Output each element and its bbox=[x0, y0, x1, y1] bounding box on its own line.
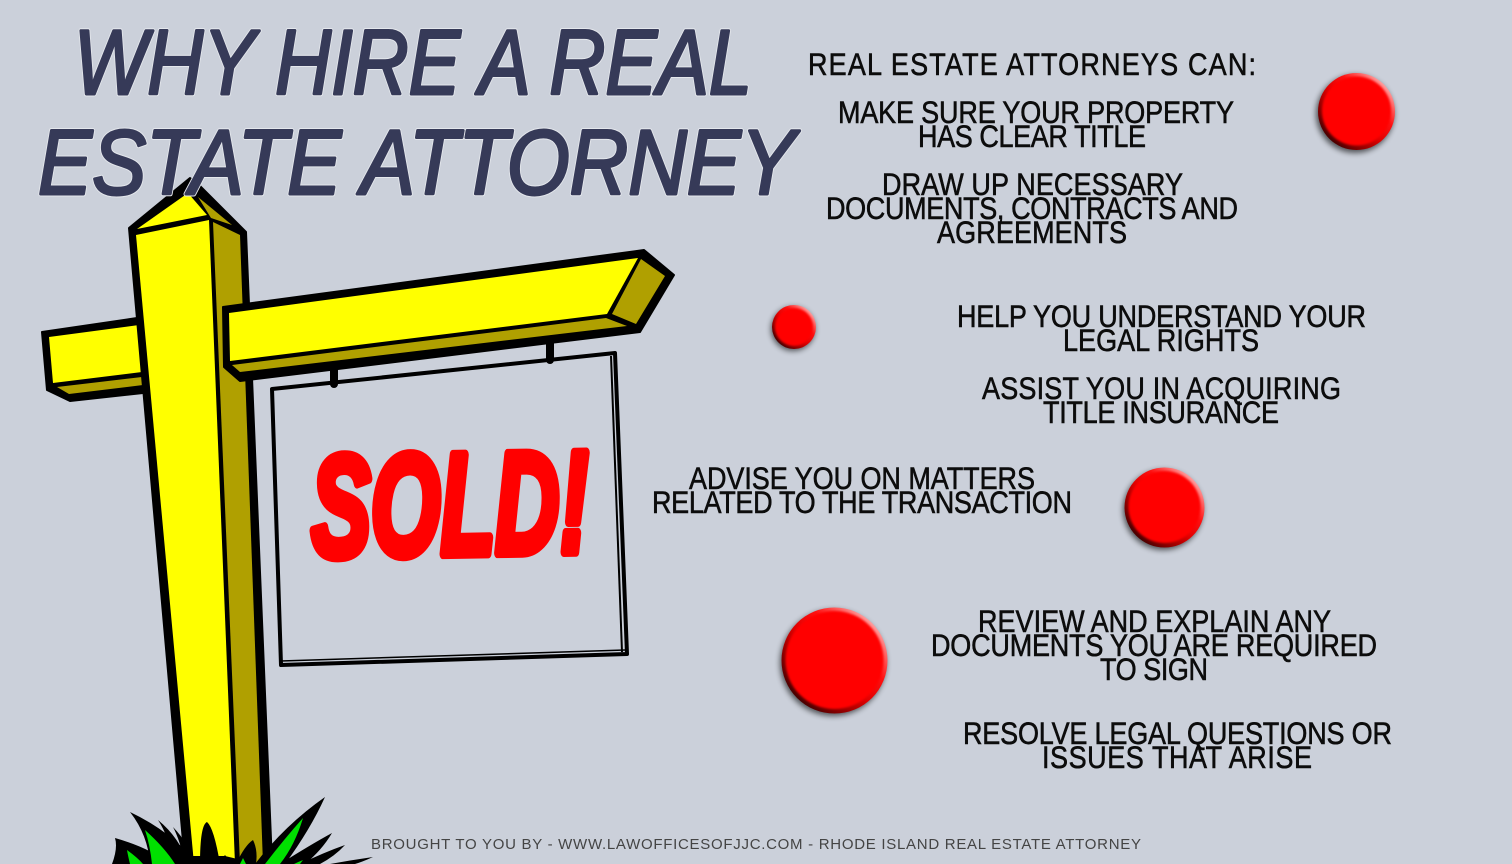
text block: clear title bbox=[838, 95, 1234, 155]
text block: review documents: DOCUMENTS YOU ARE REQUIRED bbox=[931, 628, 1377, 664]
sign hangers bbox=[334, 336, 550, 384]
text block: documents: DOCUMENTS, CONTRACTS AND bbox=[826, 191, 1238, 227]
title line 1: WHY HIRE A REAL bbox=[74, 12, 752, 114]
text block: title insurance bbox=[982, 371, 1341, 431]
icon: red dot large bbox=[780, 608, 888, 716]
text block: transaction: RELATED TO THE TRANSACTION bbox=[652, 485, 1072, 521]
icon: grass tuft bbox=[112, 797, 373, 864]
text block: legal questions: ISSUES THAT ARISE bbox=[1042, 740, 1312, 776]
heading: real estate attorneys can: REAL ESTATE ATTORNEYS CAN: bbox=[808, 47, 1256, 83]
vertical post bbox=[129, 178, 272, 864]
title line 2 halo: ESTATE ATTORNEY bbox=[38, 112, 800, 214]
text block: documents bbox=[826, 167, 1238, 251]
text block: legal questions bbox=[963, 716, 1392, 776]
text block: legal rights: HELP YOU UNDERSTAND YOUR bbox=[957, 299, 1366, 335]
text block: title insurance: ASSIST YOU IN ACQUIRING bbox=[982, 371, 1341, 407]
title line 2: ESTATE ATTORNEY bbox=[38, 112, 800, 214]
text block: clear title: HAS CLEAR TITLE bbox=[918, 119, 1146, 155]
text block: clear title: MAKE SURE YOUR PROPERTY bbox=[838, 95, 1234, 131]
sold text on sign: SOLD! bbox=[310, 422, 590, 587]
footer credit: BROUGHT TO YOU BY - WWW.LAWOFFICESOFJJC.COM - RHODE ISLAND REAL ESTATE ATTORNEY bbox=[371, 836, 1141, 853]
upper arm of post bbox=[223, 250, 674, 381]
icon: red dot top right bbox=[1316, 73, 1395, 153]
text block: review documents: REVIEW AND EXPLAIN ANY bbox=[978, 604, 1331, 640]
text block: transaction: ADVISE YOU ON MATTERS bbox=[689, 461, 1035, 497]
icon: red dot small bbox=[771, 305, 816, 351]
title line 1 halo: WHY HIRE A REAL bbox=[74, 12, 752, 114]
hanging sign board bbox=[272, 353, 627, 665]
text block: transaction bbox=[652, 461, 1072, 521]
text block: legal questions: RESOLVE LEGAL QUESTIONS OR bbox=[963, 716, 1392, 752]
icon: red dot middle bbox=[1123, 468, 1204, 550]
sign post illustration bbox=[42, 178, 674, 864]
text block: review documents bbox=[931, 604, 1377, 688]
text block: documents: AGREEMENTS bbox=[937, 215, 1127, 251]
text block: legal rights: LEGAL RIGHTS bbox=[1063, 323, 1259, 359]
text block: documents: DRAW UP NECESSARY bbox=[882, 167, 1183, 203]
title bbox=[38, 12, 800, 214]
text block: legal rights bbox=[957, 299, 1366, 359]
text block: title insurance: TITLE INSURANCE bbox=[1043, 395, 1279, 431]
text block: review documents: TO SIGN bbox=[1100, 652, 1208, 688]
left arm of post bbox=[42, 318, 143, 401]
